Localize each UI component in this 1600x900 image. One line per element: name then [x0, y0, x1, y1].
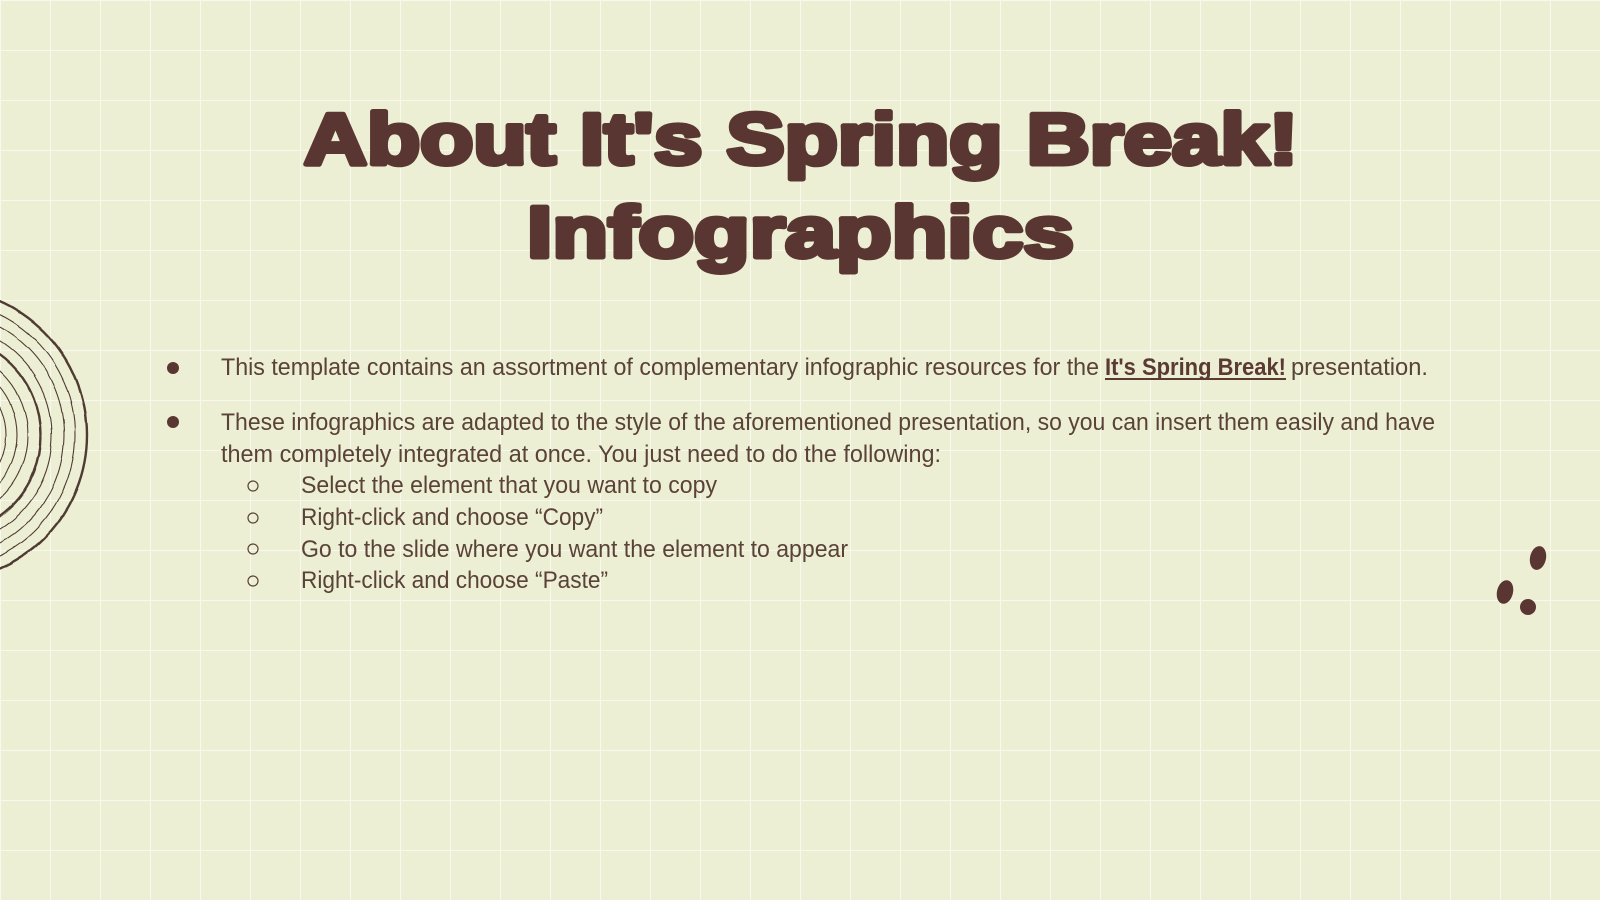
bullet list — [167, 354, 1435, 594]
icon: tree rings — [0, 289, 87, 581]
bullet item: usage description — [167, 409, 1435, 468]
sub-list: steps: Right-click and choose “Paste” — [301, 567, 608, 594]
bullet item: template description: It's Spring Break! — [1105, 354, 1286, 381]
title — [304, 100, 1298, 273]
sub-list: steps: Right-click and choose “Copy” — [301, 504, 603, 531]
sub-list: steps: Go to the slide where you want the element to appear — [301, 536, 848, 563]
bullet item: usage description: them completely integrated at once. You just need to do the following: — [221, 441, 941, 468]
sub-list: steps — [248, 472, 848, 594]
bullet item: usage description: These infographics are adapted to the style of the aforementioned presentation, so you can insert them easily and have — [221, 409, 1435, 436]
bullet item: template description: This template contains an assortment of complementary infographic resources for the — [221, 354, 1099, 381]
title: About It's Spring Break! — [304, 100, 1298, 180]
bullet item: template description: presentation. — [1291, 354, 1428, 381]
icon: seeds — [1494, 545, 1548, 615]
title: Infographics — [527, 193, 1074, 273]
sub-list: steps: Select the element that you want to copy — [301, 472, 717, 499]
